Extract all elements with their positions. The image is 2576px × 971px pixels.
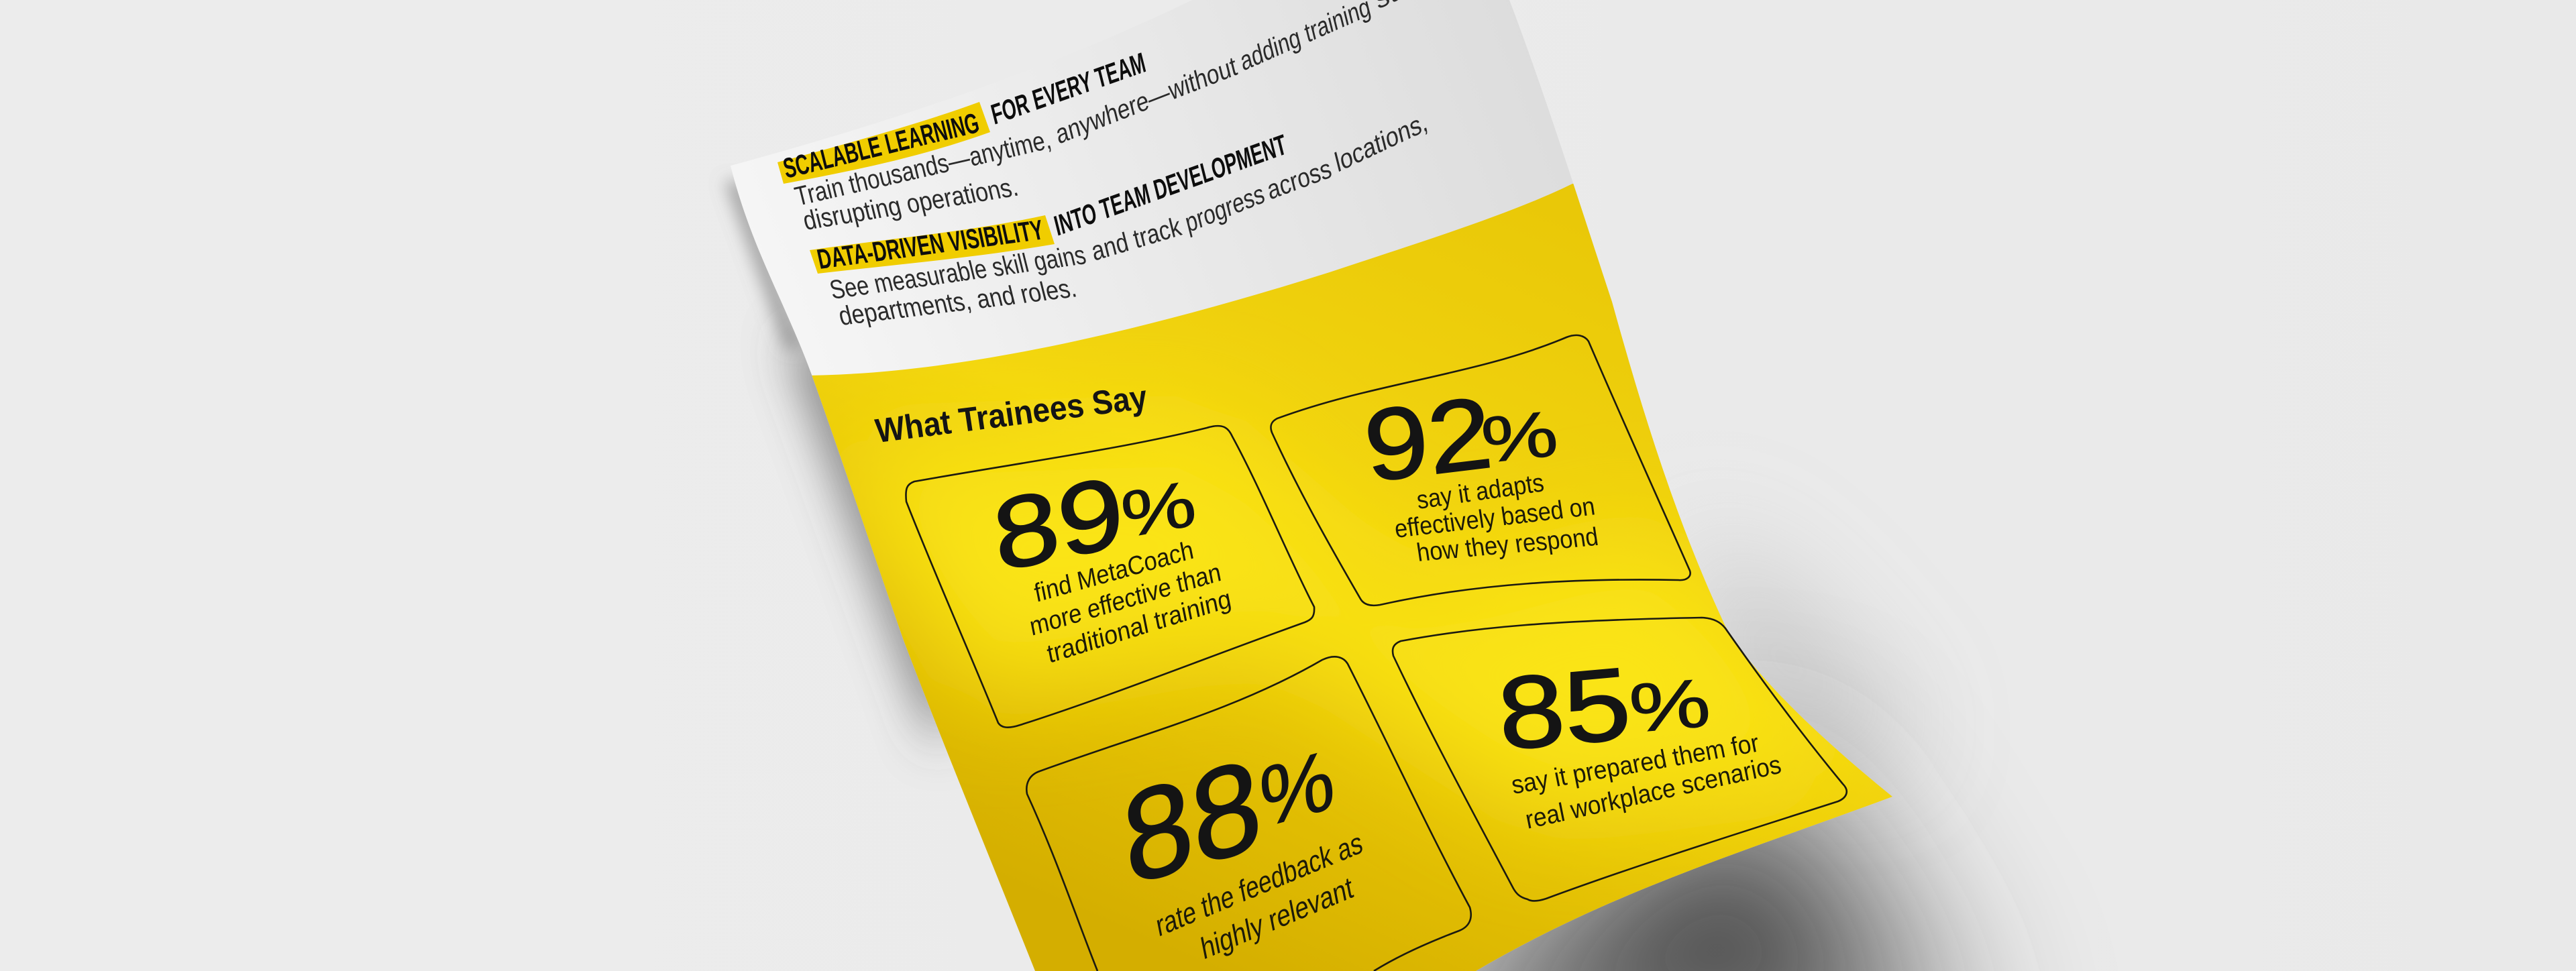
stat: 92: 92 (1359, 375, 1497, 503)
caption: find MetaCoach more effective than traditional training: traditional training (1044, 584, 1234, 669)
paper sheet (731, 0, 1945, 971)
stat: 89: 89 (987, 455, 1130, 593)
stat: percent sign: % (1478, 398, 1561, 477)
shadow: left of paper (788, 335, 953, 751)
shadow: top left paper edge (724, 181, 805, 349)
card: 88 percent (1026, 656, 1471, 971)
card: 89 percent (906, 426, 1314, 728)
caption: rate the feedback as highly relevant: rate the feedback as (1153, 825, 1365, 944)
stat: percent sign: % (1118, 466, 1199, 552)
caption: say it prepared them for real workplace scenarios: say it prepared them for (1509, 729, 1762, 800)
body text: scalable learning: Train thousands—anytime, (792, 125, 1054, 212)
body text: data-driven visibility: progress (1182, 178, 1267, 239)
caption: say it prepared them for real workplace scenarios: real workplace scenarios (1523, 750, 1784, 835)
highlight: data-driven visibility (810, 215, 1055, 274)
caption: find MetaCoach more effective than traditional training: more effective than (1027, 558, 1224, 642)
heading: scalable learning: SCALABLE LEARNING (780, 107, 982, 184)
heading: data-driven visibility: DATA-DRIVEN VISIBILITY (814, 214, 1046, 275)
body text: data-driven visibility: locations, (1332, 106, 1430, 178)
shadow: right of paper (1690, 523, 1912, 771)
caption: rate the feedback as highly relevant: highly relevant (1198, 870, 1356, 966)
caption: say it adapts effectively based on how they respond: how they respond (1415, 522, 1600, 567)
body text: data-driven visibility: See measurable skill gains (826, 240, 1089, 305)
highlight: scalable learning (777, 102, 990, 184)
body text: scalable learning: anywhere—without (1053, 50, 1240, 150)
stat: 85: 85 (1494, 646, 1635, 772)
section: scalable learning (777, 0, 1429, 236)
shadow: under paper (1342, 656, 1959, 971)
body text: scalable learning: disrupting operations. (800, 172, 1021, 236)
stat: 88: 88 (1117, 731, 1267, 913)
caption: find MetaCoach more effective than traditional training: find MetaCoach (1032, 536, 1196, 608)
body text: data-driven visibility: departments, and roles. (835, 274, 1079, 331)
stat: percent sign: % (1627, 664, 1713, 747)
card: 92 percent (1271, 335, 1690, 606)
heading: what trainees say: What Trainees Say (873, 378, 1150, 450)
body text: data-driven visibility (826, 106, 1430, 331)
section: data-driven visibility (810, 106, 1430, 331)
caption: say it adapts effectively based on how they respond: say it adapts (1415, 468, 1546, 515)
body text: data-driven visibility: and track (1088, 211, 1185, 267)
heading: for every team: FOR EVERY TEAM (988, 47, 1148, 131)
caption: say it adapts effectively based on how they respond: effectively based on (1393, 492, 1597, 544)
caption: rate the feedback as highly relevant (1153, 825, 1365, 966)
heading: into team development: INTO TEAM DEVELOPMENT (1051, 129, 1289, 243)
body text: data-driven visibility: across (1264, 153, 1334, 206)
card: 85 percent (1393, 618, 1847, 901)
body text: scalable learning (792, 0, 1429, 236)
caption: find MetaCoach more effective than traditional training (1027, 536, 1234, 669)
caption: say it adapts effectively based on how they respond (1393, 468, 1600, 567)
stat: percent sign: % (1256, 732, 1338, 846)
